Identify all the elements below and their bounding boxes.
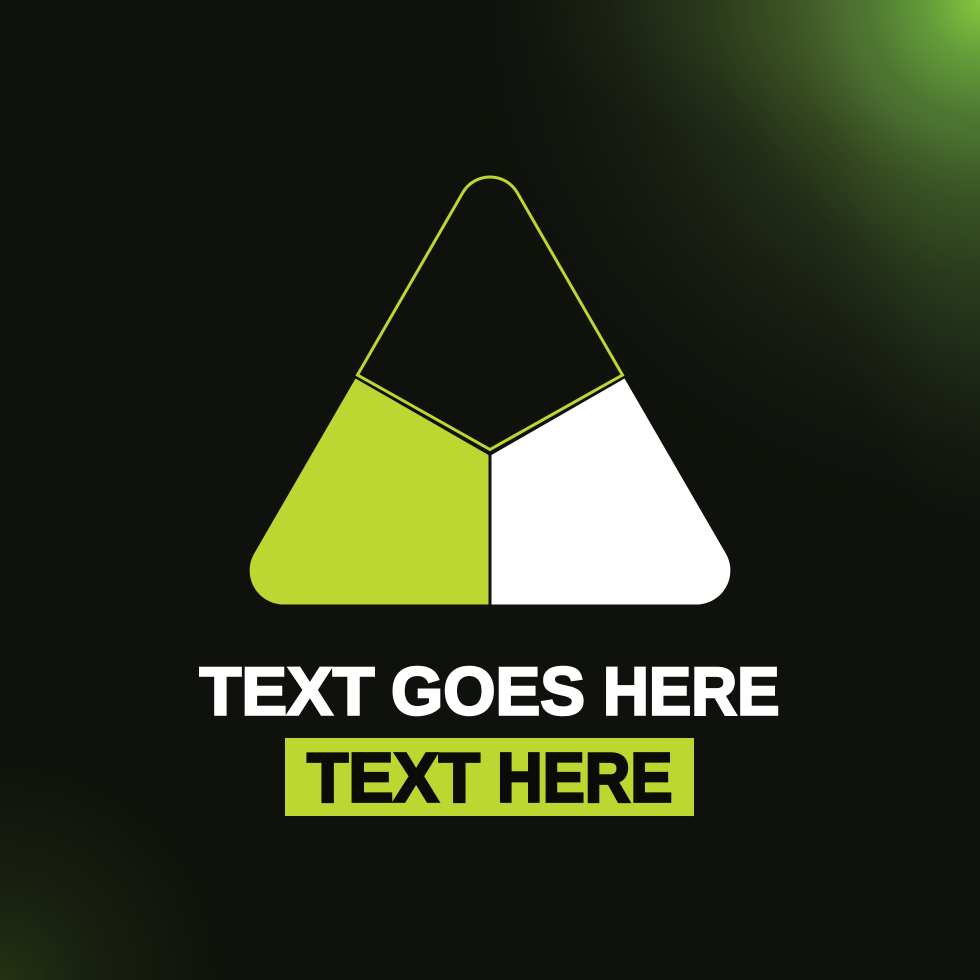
banner background [285,738,694,816]
heading: GOES [391,654,585,730]
segment: top outlined [358,177,622,449]
heading: HERE [603,654,780,730]
banner text [307,739,672,817]
banner text: HERE [497,739,672,817]
triangle diagram [250,177,730,604]
heading: TEXT [200,654,374,730]
banner text: TEXT [307,739,480,817]
segment: bottom right white [492,378,730,604]
heading [200,654,780,730]
segment: bottom left green [250,378,488,604]
label banner [285,738,694,817]
